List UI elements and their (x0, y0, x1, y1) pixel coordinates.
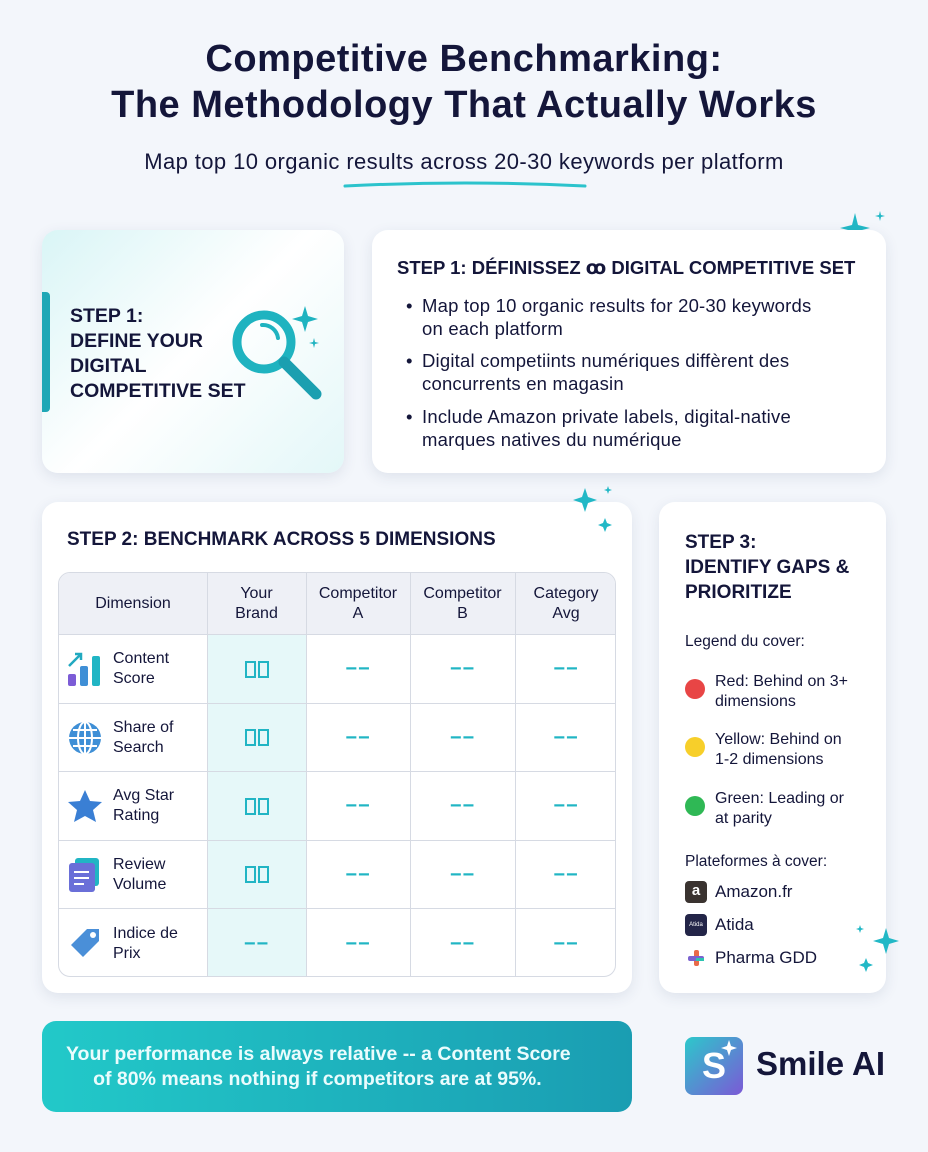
legend yellow: Yellow: Behind on (715, 731, 842, 748)
table: A (353, 604, 363, 622)
title (111, 38, 817, 126)
heading: STEP 1: (70, 305, 143, 327)
legend red: Red: Behind on 3+ (715, 673, 848, 690)
table: Competitor (319, 584, 397, 602)
sparkles top right (840, 211, 885, 230)
row: avg star rating: Rating (113, 807, 159, 824)
title: Competitive Benchmarking: (205, 38, 723, 80)
bullet 3 (400, 405, 870, 451)
legend yellow: 1-2 dimensions (715, 751, 824, 768)
row: review volume: −− (345, 864, 371, 886)
legend green: Green: Leading or (715, 790, 844, 807)
callout banner: of 80% means nothing if competitors are at 95%. (93, 1068, 542, 1090)
platform list: Atida (689, 922, 703, 928)
decorative underline (344, 182, 586, 188)
row: avg star rating: −− (345, 795, 371, 817)
bullet 3: marques natives du numérique (422, 429, 682, 450)
heading (70, 305, 246, 402)
panel: step1 details (372, 230, 886, 473)
platform list: a (692, 882, 700, 899)
bullet 1: Map top 10 organic results for 20-30 keywords (422, 295, 811, 316)
row: share of search: −− (345, 726, 371, 748)
heading: step3: PRIORITIZE (685, 582, 792, 603)
row: avg star rating (59, 772, 615, 841)
heading: step3 (685, 532, 849, 603)
heading: step2: STEP 2: BENCHMARK ACROSS 5 DIMENSIONS (67, 529, 496, 550)
row: avg star rating: −− (553, 795, 579, 817)
row: content score: Score (113, 670, 155, 687)
bullet 1 (400, 294, 870, 340)
subtitle: Map top 10 organic results across 20-30 keywords per platform (144, 149, 784, 174)
legend title: Legend du cover: (685, 633, 805, 650)
sparkles step3 (856, 925, 899, 972)
sparkles step2 (573, 486, 612, 532)
row: indice de prix: Prix (113, 944, 141, 962)
row: share of search: −− (553, 726, 579, 748)
row: indice de prix: −− (450, 932, 475, 954)
heading: step3: STEP 3: (685, 532, 756, 553)
bullet 2 (400, 349, 870, 395)
row: indice de prix: −− (553, 932, 579, 954)
row: content score (59, 635, 615, 704)
row: share of search: Search (113, 738, 164, 756)
row: avg star rating: −− (450, 795, 475, 817)
row: share of search (59, 704, 615, 772)
platform list: Pharma GDD (715, 948, 817, 967)
heading: DEFINE YOUR (70, 330, 203, 352)
table: Avg (552, 604, 580, 622)
row: content score: −− (553, 658, 579, 680)
logo (685, 1037, 885, 1095)
heading: COMPETITIVE SET (70, 380, 246, 402)
bullet 3: Include Amazon private labels, digital-native (422, 406, 791, 427)
legend red: dimensions (715, 693, 796, 710)
logo: Smile AI (756, 1045, 885, 1082)
platform list: Amazon.fr (715, 882, 792, 901)
row: avg star rating: Avg Star (113, 787, 174, 804)
row: review volume: −− (553, 864, 579, 886)
legend green (685, 790, 844, 827)
row: share of search: −− (450, 726, 475, 748)
heading: step3: IDENTIFY GAPS & (685, 557, 849, 578)
heading: DIGITAL (70, 355, 147, 377)
row: indice de prix: Indice de (113, 924, 178, 942)
platforms title: Plateformes à cover: (685, 853, 827, 870)
legend yellow (685, 731, 842, 768)
row: indice de prix: −− (345, 932, 371, 954)
bullet 1: on each platform (422, 318, 563, 339)
row: content score: −− (450, 658, 475, 680)
platform list (685, 881, 817, 967)
row: review volume: Review (113, 856, 165, 872)
accent bar (42, 292, 50, 412)
row: review volume: −− (450, 864, 475, 886)
table: Dimension (95, 594, 171, 612)
logo: S (702, 1045, 726, 1086)
callout banner (42, 1021, 632, 1112)
panel: step3 (659, 502, 886, 993)
row: indice de prix (71, 909, 579, 976)
legend green: at parity (715, 810, 772, 827)
table: Competitor (423, 584, 502, 602)
table: Category (534, 584, 598, 602)
row: share of search: Share of (113, 718, 173, 736)
platform list: Atida (715, 915, 754, 934)
row: content score: −− (345, 658, 371, 680)
title: The Methodology That Actually Works (111, 84, 817, 126)
legend red (685, 673, 848, 710)
bullet 2: concurrents en magasin (422, 373, 624, 394)
panel: step1 title card (42, 230, 344, 473)
bullet 2: Digital competiints numériques diffèrent des (422, 350, 789, 371)
row: indice de prix: −− (244, 932, 269, 954)
callout banner: Your performance is always relative -- a Content Score (66, 1043, 571, 1065)
table: Brand (235, 604, 278, 622)
table: B (457, 604, 468, 622)
panel: step2 (42, 502, 632, 993)
table: Your (240, 584, 273, 602)
row: content score: Content (113, 650, 169, 667)
table (58, 572, 616, 977)
heading: step1 details: STEP 1: DÉFINISSEZ ꝏ DIGITAL COMPETITIVE SET (397, 257, 855, 278)
icon: magnifier (232, 306, 322, 400)
row: review volume: Volume (113, 876, 166, 892)
row: review volume (59, 841, 615, 909)
